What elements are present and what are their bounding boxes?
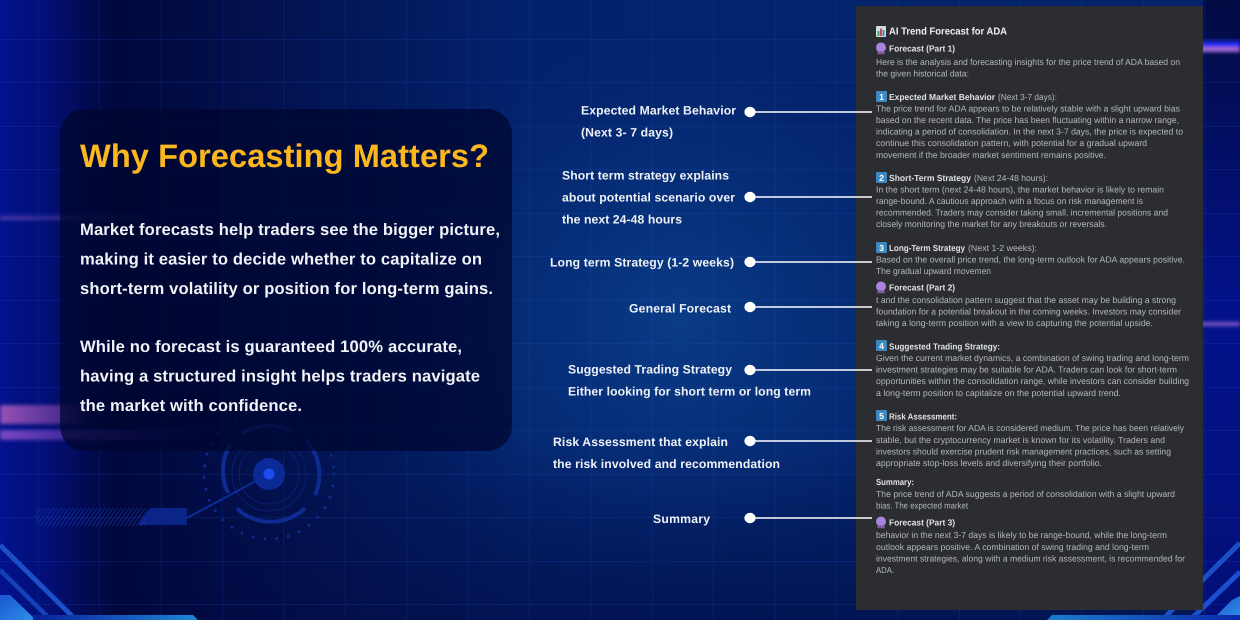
section 5: risk assessment: stable, but the cryptocurrency market is known for its volatility. Traders and: [876, 435, 1165, 445]
callout: short term strategy: [562, 168, 872, 226]
corner decoration: bottom left: [0, 545, 198, 620]
callout: long term strategy: Long term Strategy (1-2 weeks): [550, 256, 734, 270]
section 2: short-term strategy: (Next 24-48 hours):: [974, 173, 1048, 183]
intro text: Here is the analysis and forecasting insights for the price trend of ADA based on: [876, 57, 1180, 67]
part 3 heading: Forecast (Part 3): [889, 518, 955, 528]
paragraph two: [80, 337, 480, 415]
section 2: short-term strategy: [876, 172, 1168, 229]
screenshot background: [856, 6, 1203, 610]
icon: crystal ball: [876, 282, 886, 293]
part 1 heading: Forecast (Part 1): [889, 44, 955, 54]
callout: suggested trading strategy: Either looking for short term or long term: [568, 384, 811, 398]
section 1: expected market behavior: movement if the broader market sentiment remains positive.: [876, 150, 1106, 160]
part 3 text: behavior in the next 3-7 days is likely to be range-bound, while the long-term: [876, 530, 1167, 540]
section 2: short-term strategy: recommended. Traders may consider taking small, incremental positions and: [876, 208, 1168, 218]
intro text: the given historical data:: [876, 68, 969, 78]
paragraph two: having a structured insight helps traders navigate: [80, 366, 480, 386]
section 2: short-term strategy: 2: [879, 173, 884, 183]
section 4: suggested trading strategy: 4: [879, 341, 884, 351]
callout: expected market behavior: [581, 104, 872, 140]
part 3 text: outlook appears positive. A combination of swing trading and long-term: [876, 542, 1149, 552]
section 5: risk assessment: [876, 410, 1185, 468]
paragraph one: short-term volatility or position for long-term gains.: [80, 279, 493, 298]
callout: short term strategy: about potential scenario over: [562, 190, 735, 204]
part 2 text: foundation for a potential breakout in the coming weeks. Investors may consider: [876, 306, 1181, 316]
section 5: risk assessment: 5: [879, 411, 884, 421]
callout: summary: [653, 512, 872, 526]
section 4: suggested trading strategy: Suggested Trading Strategy:: [889, 342, 1000, 352]
summary section: The price trend of ADA suggests a period of consolidation with a slight upward: [876, 489, 1175, 499]
connector ends over the panel: [856, 112, 872, 518]
section 3: long-term strategy: Based on the overall price trend, the long-term outlook for ADA appears positive.: [876, 254, 1185, 264]
callout: general forecast: [629, 302, 872, 316]
paragraph one: [80, 220, 500, 298]
section 1: expected market behavior: [876, 91, 1183, 160]
callout: long term strategy: [550, 256, 872, 270]
section 1: expected market behavior: The price trend for ADA appears to be relatively stable with a slight upward bias: [876, 104, 1181, 114]
section 3: long-term strategy: [876, 242, 1185, 276]
section 5: risk assessment: investors should exercise prudent risk management practices, such as setting: [876, 446, 1171, 456]
part 3 text: ADA.: [876, 565, 894, 575]
icon: crystal ball: [876, 42, 886, 54]
section 3: long-term strategy: Long-Term Strategy: [889, 243, 965, 253]
part 3 text: [876, 530, 1185, 575]
radar graphic: [35, 409, 334, 539]
paragraph two: While no forecast is guaranteed 100% accurate,: [80, 337, 462, 356]
section 1: expected market behavior: (Next 3-7 days):: [998, 92, 1057, 102]
paragraph one: Market forecasts help traders see the bigger picture,: [80, 220, 500, 239]
section 1: expected market behavior: continue this consolidation pattern, with potential for a gradual upward: [876, 138, 1147, 148]
callout: short term strategy: Short term strategy explains: [562, 168, 729, 182]
section 2: short-term strategy: closely monitoring the market for any breakouts or reversals.: [876, 219, 1107, 229]
decorative light streaks, left: [0, 216, 210, 440]
callout: expected market behavior: (Next 3- 7 days): [581, 126, 673, 140]
section 2: short-term strategy: Short-Term Strategy: [889, 173, 971, 183]
section 3: long-term strategy: 3: [879, 243, 884, 253]
icon: crystal ball: [876, 516, 886, 528]
panel: why forecasting matters: [60, 109, 512, 451]
callout: suggested trading strategy: [568, 362, 872, 398]
callout labels and connectors: [550, 104, 872, 526]
part 2 heading: Forecast (Part 2): [889, 282, 955, 292]
callout: expected market behavior: Expected Market Behavior: [581, 104, 736, 118]
summary section: [876, 477, 1175, 510]
callout: short term strategy: the next 24-48 hours: [562, 212, 682, 226]
section 4: suggested trading strategy: [876, 340, 1189, 398]
decorative light streaks, right: [1200, 41, 1240, 326]
callout: risk assessment: Risk Assessment that explain: [553, 435, 728, 449]
section 4: suggested trading strategy: a long-term position to capitalize on the potential upward trend.: [876, 388, 1121, 398]
callout: suggested trading strategy: Suggested Trading Strategy: [568, 362, 732, 376]
summary section: Summary:: [876, 477, 914, 487]
section 5: risk assessment: The risk assessment for ADA is considered medium. The price has been relatively: [876, 423, 1185, 433]
panel: AI trend forecast screenshot: [856, 6, 1203, 610]
part 2 text: taking a long-term position with a view to capturing the potential upside.: [876, 318, 1153, 328]
panel background: [60, 109, 512, 451]
intro text: [876, 57, 1180, 78]
section 4: suggested trading strategy: Given the current market dynamics, a combination of swing trading and long-term: [876, 353, 1189, 363]
section 1: expected market behavior: indicating a period of consolidation. In the next 3-7 days, the price is expected to: [876, 126, 1183, 136]
callout: risk assessment: the risk involved and recommendation: [553, 457, 780, 471]
screenshot text: [876, 26, 1189, 575]
summary section: bias. The expected market: [876, 500, 968, 510]
paragraph one: making it easier to decide whether to capitalize on: [80, 250, 482, 268]
icon: chart: [876, 26, 886, 37]
section 3: long-term strategy: The gradual upward movemen: [876, 266, 991, 276]
section 2: short-term strategy: In the short term (next 24-48 hours), the market behavior is likely to remain: [876, 184, 1164, 194]
section 5: risk assessment: appropriate stop-loss levels and diversifying their portfolio.: [876, 458, 1102, 468]
section 2: short-term strategy: range-bound. A cautious approach with a focus on risk management is: [876, 196, 1144, 206]
section 4: suggested trading strategy: investment strategies may be suitable for ADA. Traders can look for short-term: [876, 364, 1177, 374]
heading: Why Forecasting Matters?: [80, 137, 489, 174]
callout: summary: Summary: [653, 512, 710, 526]
section 1: expected market behavior: Expected Market Behavior: [889, 92, 996, 102]
section 1: expected market behavior: based on the recent data. The price has been fluctuating within a narrow range,: [876, 115, 1179, 125]
corner decoration: bottom right: [1047, 543, 1240, 620]
callout: risk assessment: [553, 435, 872, 471]
paragraph two: the market with confidence.: [80, 396, 302, 415]
part 2 text: [876, 295, 1181, 328]
callout: general forecast: General Forecast: [629, 302, 731, 316]
section 1: expected market behavior: 1: [879, 92, 884, 102]
section 4: suggested trading strategy: opportunities within the consolidation range, while investors can consider building: [876, 376, 1189, 386]
section 5: risk assessment: Risk Assessment:: [889, 412, 957, 422]
screenshot title: AI Trend Forecast for ADA: [889, 26, 1008, 38]
part 3 text: investment strategies, along with a medium risk assessment, is recommended for: [876, 554, 1185, 564]
section 3: long-term strategy: (Next 1-2 weeks):: [968, 243, 1037, 253]
part 2 text: t and the consolidation pattern suggest that the asset may be building a strong: [876, 295, 1176, 305]
